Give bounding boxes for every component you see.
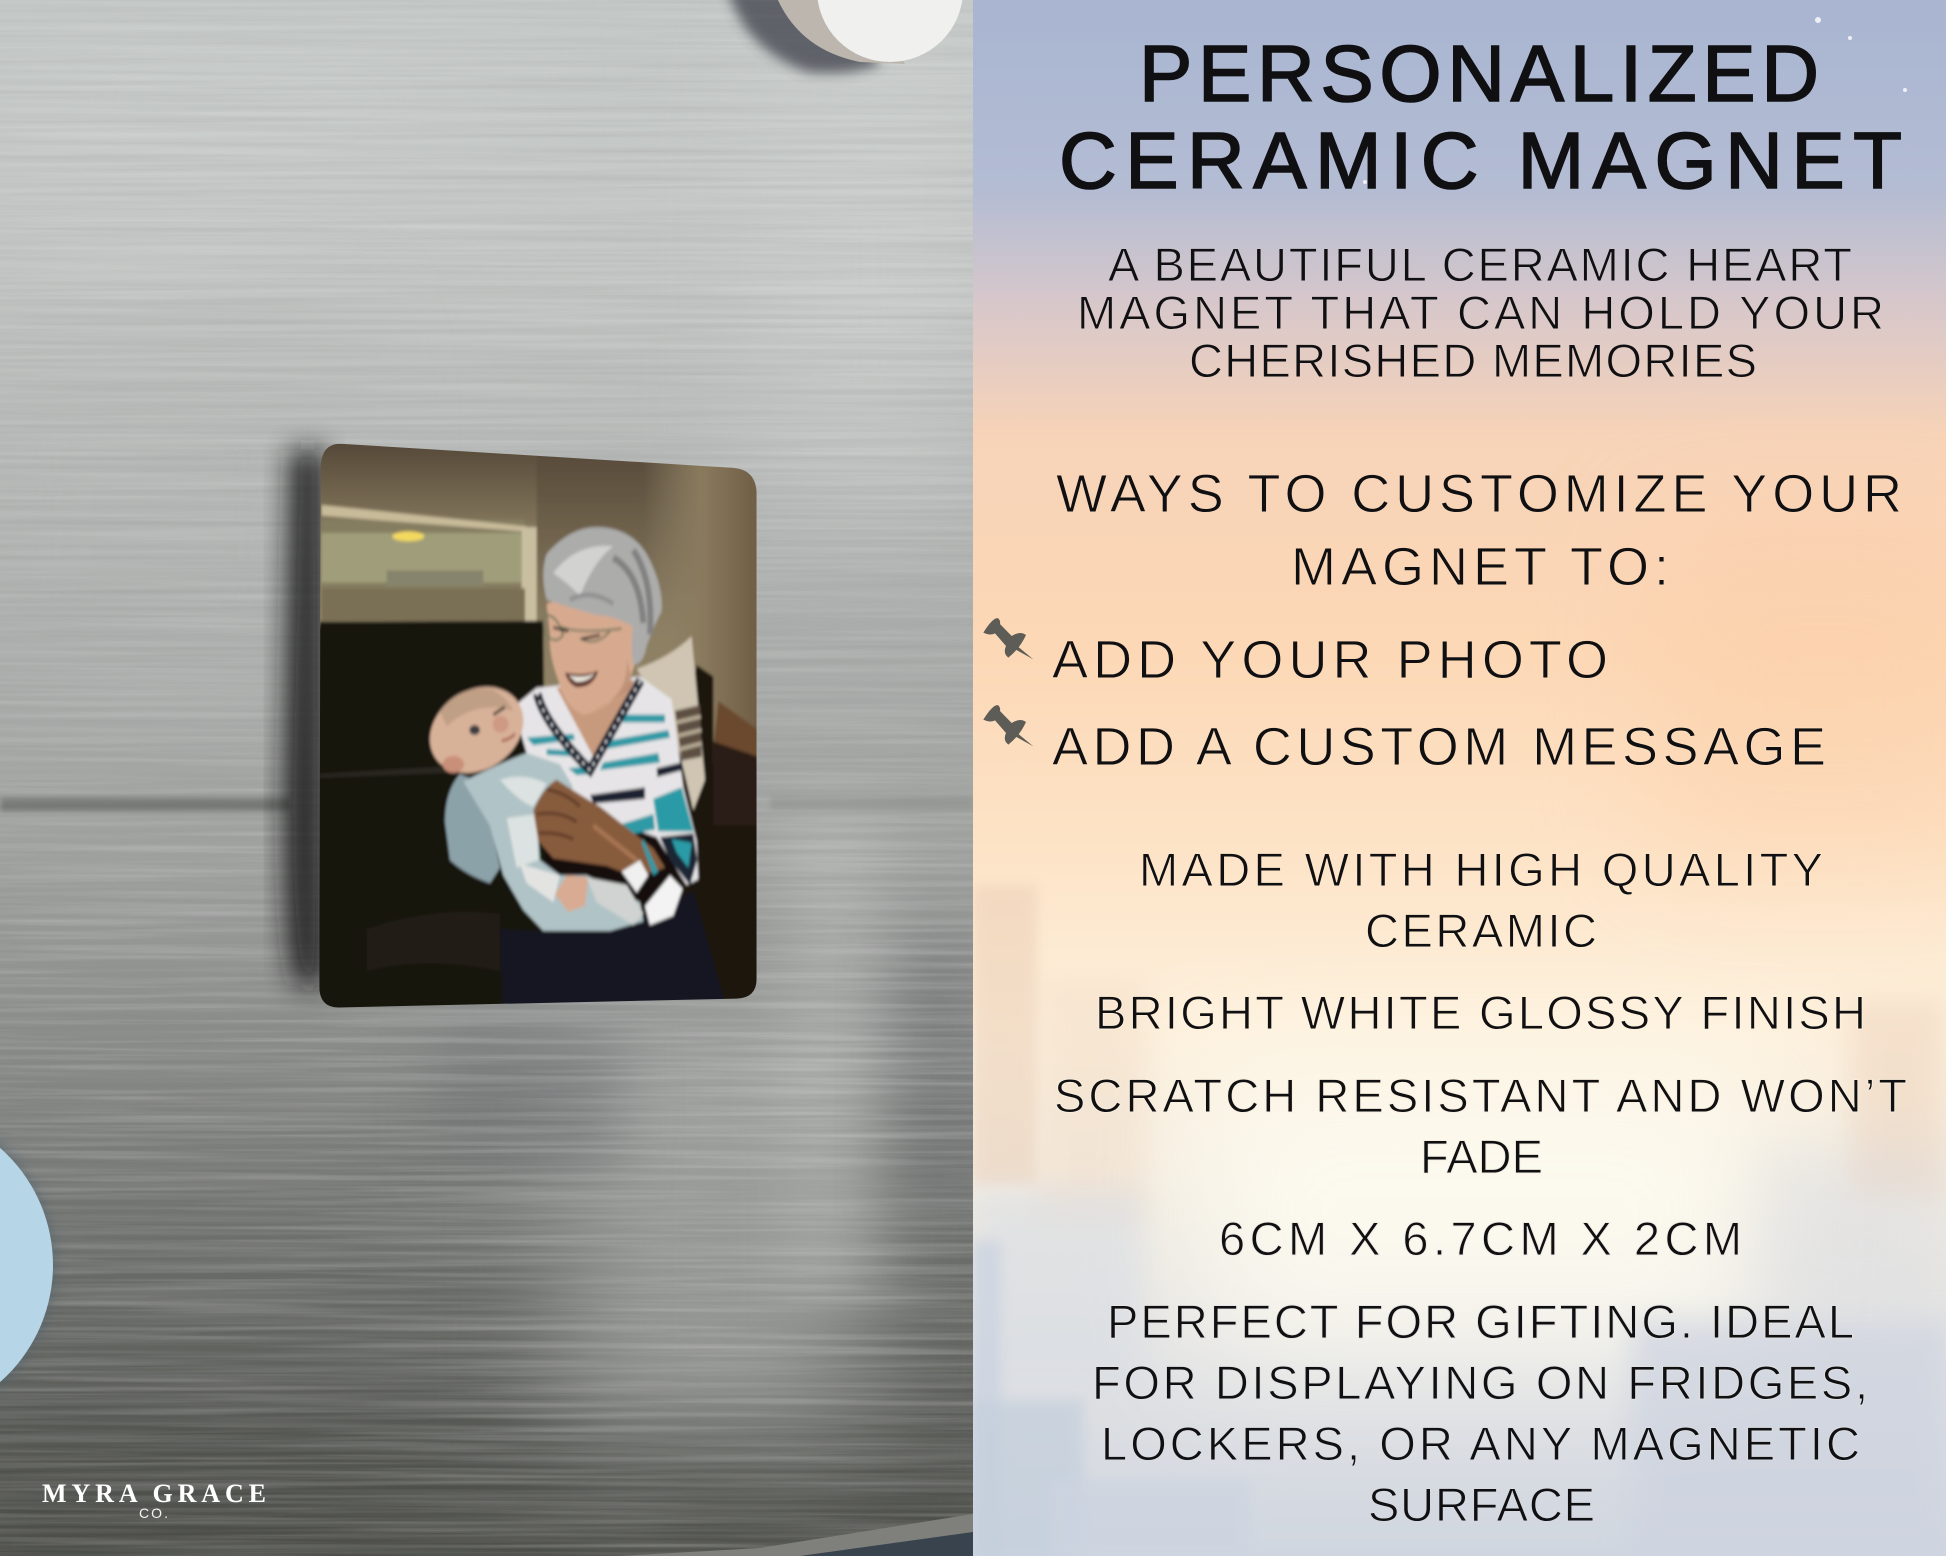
subtitle	[1077, 238, 1884, 387]
feature: dimensions: 6CM X 6.7CM X 2CM	[1219, 1212, 1742, 1265]
photo: woman's hand	[533, 780, 665, 877]
feature: gifting: PERFECT FOR GIFTING. IDEAL	[1107, 1295, 1854, 1348]
icon: white round magnet top	[728, 0, 963, 73]
title: CERAMIC MAGNET	[1059, 116, 1902, 205]
photo: right side chair and shadow	[677, 665, 760, 1009]
customize option: photo: ADD YOUR PHOTO	[1052, 630, 1608, 690]
title	[1059, 29, 1902, 205]
photo: pillow	[637, 636, 705, 810]
brand logo: MYRA GRACE	[42, 1479, 266, 1508]
feature: finish: BRIGHT WHITE GLOSSY FINISH	[1095, 986, 1866, 1039]
customize heading: MAGNET TO:	[1291, 537, 1669, 597]
subtitle: MAGNET THAT CAN HOLD YOUR	[1077, 286, 1884, 339]
horizontal panel seam	[0, 798, 290, 811]
feature: gifting: SURFACE	[1368, 1478, 1595, 1531]
feature: gifting	[1092, 1295, 1868, 1531]
customize heading	[1056, 464, 1902, 597]
brand logo: CO.	[139, 1505, 168, 1521]
feature: ceramic: CERAMIC	[1365, 904, 1597, 957]
photo: dotted collar	[537, 680, 641, 770]
icon: push pin 1	[983, 618, 1033, 659]
photo: alcove with lamp	[322, 505, 537, 621]
photo: baby's head	[419, 672, 535, 788]
sky sparkles	[1363, 17, 1907, 184]
photo: woman's grey hair	[543, 527, 662, 665]
photo: baby blanket and onesie	[445, 753, 643, 931]
photo: baby's hand and feet	[555, 839, 683, 925]
photo: wall	[320, 444, 538, 628]
photo magnet	[317, 439, 760, 1013]
feature: scratch resistant: FADE	[1420, 1130, 1543, 1183]
feature: scratch resistant: SCRATCH RESISTANT AND WON’T	[1054, 1069, 1907, 1122]
feature: gifting: FOR DISPLAYING ON FRIDGES,	[1092, 1356, 1868, 1409]
panel: brushed metal fridge photo	[0, 0, 980, 1556]
customize option: message: ADD A CUSTOM MESSAGE	[1052, 717, 1826, 777]
feature: ceramic	[1139, 843, 1823, 957]
photo: woman's dark trousers	[500, 891, 727, 1009]
title: PERSONALIZED	[1139, 29, 1819, 118]
photo: woman's neck	[557, 680, 635, 757]
brand logo	[42, 1484, 265, 1518]
feature: scratch resistant	[1054, 1069, 1907, 1183]
magnet shadow	[284, 450, 325, 985]
fridge bottom edge	[620, 1514, 973, 1556]
watercolor glow and skyline	[973, 520, 1946, 1556]
icon: push pin 2	[983, 705, 1033, 746]
panel: watercolor sky background	[973, 0, 1946, 1556]
photo: couch	[319, 621, 547, 1009]
photo: woman's face	[543, 597, 637, 715]
customize heading: WAYS TO CUSTOMIZE YOUR	[1056, 464, 1902, 524]
feature: gifting: LOCKERS, OR ANY MAGNETIC	[1101, 1417, 1860, 1470]
subtitle: A BEAUTIFUL CERAMIC HEART	[1108, 238, 1852, 291]
photo: striped shirt	[513, 676, 698, 885]
icon: pale blue round magnet left	[0, 1141, 58, 1382]
subtitle: CHERISHED MEMORIES	[1189, 334, 1757, 387]
metal lighting patches	[8, 338, 973, 1491]
feature: ceramic: MADE WITH HIGH QUALITY	[1139, 843, 1823, 896]
